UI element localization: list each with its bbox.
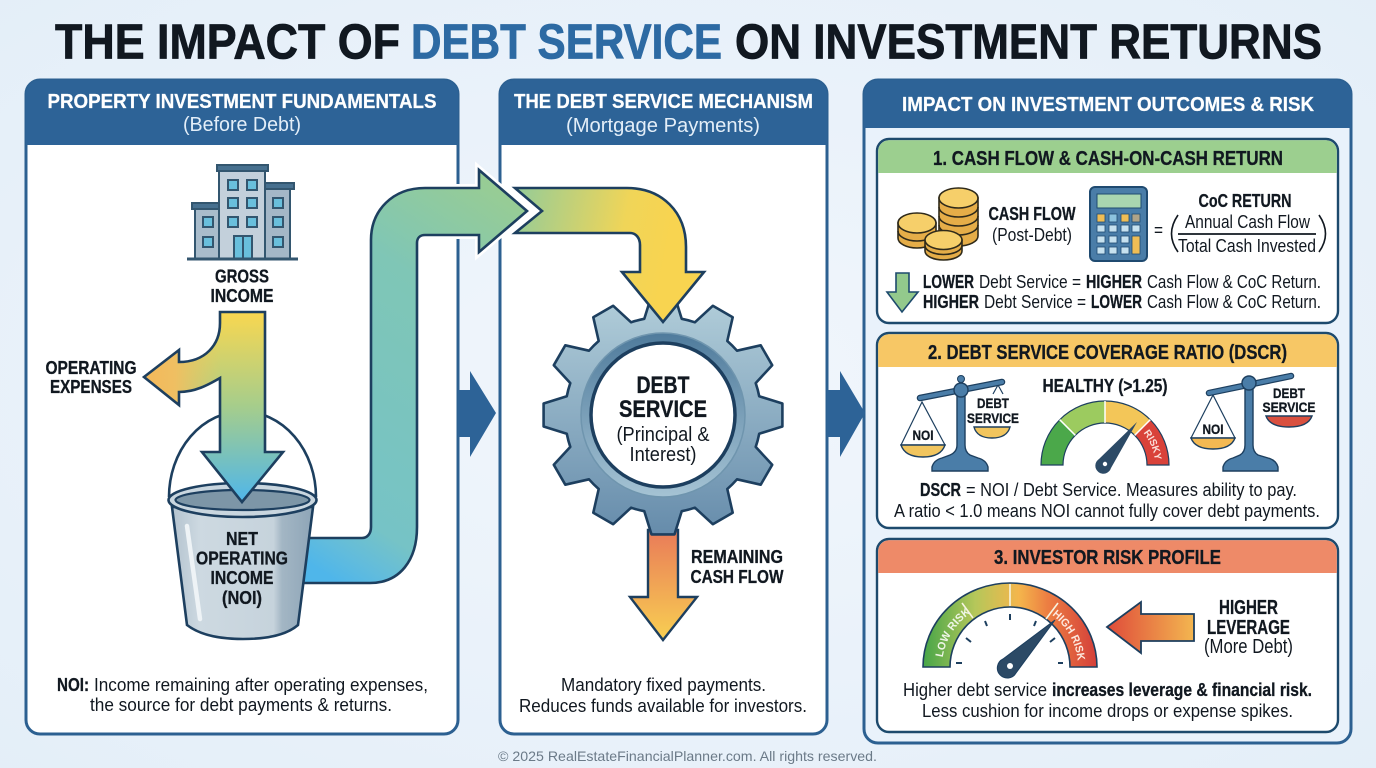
gauge: risk [922,582,1098,678]
label: healthy threshold: HEALTHY (>1.25) [1042,376,1168,396]
gauge: risk: HIGH RISK [1052,610,1086,661]
icon: balance scale, debt heavier: DEBT [1273,385,1305,401]
icon: bucket [168,411,316,639]
icon: building [187,165,298,259]
sub-panel 3 heading [878,540,1337,573]
icon: balance scale, debt heavier: NOI [1202,421,1224,437]
label: higher leverage: HIGHER [1219,597,1278,619]
label: higher leverage: LEVERAGE [1207,617,1290,639]
icon: balance scale, debt heavier: SERVICE [1262,399,1316,415]
icon: balance scale, debt heavier [1191,376,1316,471]
text: risk explanation: Higher debt service [903,680,1047,700]
sub-panel 3 heading: 3. INVESTOR RISK PROFILE [994,547,1221,569]
caption: NOI definition: NOI: [57,675,89,695]
icon: coins [898,188,978,260]
formula: CoC return: = [1154,220,1163,240]
panel: debt service mechanism [500,80,827,734]
panel header: mechanism: (Mortgage Payments) [566,115,760,137]
text: lower and higher debt service: LOWER [1091,292,1142,312]
label: higher leverage: (More Debt) [1204,636,1293,658]
text: lower and higher debt service: Debt Service = [984,292,1086,312]
sub-panel 1 heading: 1. CASH FLOW & CASH-ON-CASH RETURN [933,148,1283,170]
icon: calculator [1090,187,1147,261]
icon: balance scale, NOI heavier: SERVICE [967,410,1019,426]
label: gross income: INCOME [210,286,274,306]
text: risk explanation: increases leverage & financial risk. [1052,680,1312,700]
text: lower and higher debt service: LOWER [923,272,974,292]
label: debt service: SERVICE [619,396,707,423]
formula: CoC return: Total Cash Invested [1178,236,1316,256]
arrow: between panels 2 and 3 [827,371,865,457]
formula: CoC return: Annual Cash Flow [1185,212,1311,232]
text: lower and higher debt service: Debt Service = [979,272,1081,292]
sub-panel 2: debt service coverage ratio [876,332,1340,530]
sub-panel 1: cash flow and cash-on-cash return [877,139,1338,323]
gauge: DSCR [1040,400,1170,474]
panel header: fundamentals [26,80,458,145]
label: remaining cash flow: REMAINING [691,547,783,567]
caption: mandatory payments: Reduces funds available for investors. [519,696,807,716]
panel header: mechanism: THE DEBT SERVICE MECHANISM [514,91,813,113]
panel: property investment fundamentals [26,80,458,734]
label: gross income [210,266,274,306]
caption: NOI definition: Income remaining after operating expenses, [94,675,428,695]
panel header: fundamentals: PROPERTY INVESTMENT FUNDAMENTALS [48,91,436,113]
sub-panel 3: investor risk profile [876,538,1340,734]
caption: mandatory payments [519,675,807,716]
panel header: impact [864,80,1351,128]
label: net operating income [196,529,288,608]
text: DSCR definition: A ratio < 1.0 means NOI cannot fully cover debt payments. [894,501,1320,521]
label: higher leverage [1204,597,1293,658]
text: lower and higher debt service: HIGHER [923,292,979,312]
panel: impact on outcomes and risk [864,80,1351,743]
label: cash flow post-debt [988,204,1076,245]
text: DSCR definition: = NOI / Debt Service. Measures ability to pay. [966,480,1297,500]
label: remaining cash flow [690,547,784,587]
footer: copyright: © 2025 RealEstateFinancialPlanner.com. All rights reserved. [498,748,877,764]
sub-panel 2 heading [878,334,1337,367]
sub-panel 1 heading [878,140,1337,173]
label: debt service: Interest) [630,444,696,466]
gauge: risk: LOW RISK [935,608,971,657]
text: DSCR definition: DSCR [920,480,961,500]
caption: NOI definition: the source for debt payments & returns. [90,695,392,715]
icon: green down arrow [887,273,918,312]
formula: CoC return: CoC RETURN [1198,191,1292,211]
label: operating expenses: OPERATING [46,358,136,378]
gauge: DSCR: RISKY [1144,429,1162,459]
label: operating expenses [46,358,136,397]
arrow: NOI pipe to debt service [303,170,527,583]
panel header: fundamentals: (Before Debt) [183,114,301,136]
arrow: gross income to bucket with expenses branch [144,312,283,502]
panel header: mechanism [500,80,827,145]
sub-panel 2 heading: 2. DEBT SERVICE COVERAGE RATIO (DSCR) [928,342,1287,364]
title: THE IMPACT OF [55,16,400,70]
arrow: leverage pushes risk [1107,602,1194,653]
text: lower and higher debt service [923,272,1321,312]
text: risk explanation [903,680,1312,721]
label: cash flow post-debt: CASH FLOW [988,204,1076,224]
text: lower and higher debt service: HIGHER [1086,272,1142,292]
text: DSCR definition [894,480,1320,521]
icon: balance scale, NOI heavier [901,376,1019,471]
caption: NOI definition [57,675,428,715]
label: debt service: DEBT [636,372,690,399]
label: cash flow post-debt: (Post-Debt) [992,225,1072,245]
label: debt service: (Principal & [616,424,710,446]
label: operating expenses: EXPENSES [50,377,132,397]
icon: balance scale, NOI heavier: DEBT [977,395,1009,411]
label: net operating income: NET [226,529,258,549]
label: net operating income: (NOI) [222,588,262,608]
icon: debt service gear [544,296,782,534]
title [55,16,1322,70]
arrow: remaining cash flow [630,530,697,640]
arrow: between panels 1 and 2 [458,371,496,457]
caption: mandatory payments: Mandatory fixed payments. [561,675,766,695]
text: lower and higher debt service: Cash Flow & CoC Return. [1147,272,1321,292]
label: remaining cash flow: CASH FLOW [690,567,784,587]
arrow: into gear [515,188,704,322]
label: net operating income: INCOME [210,568,274,588]
text: risk explanation: Less cushion for income drops or expense spikes. [922,701,1293,721]
text: lower and higher debt service: Cash Flow & CoC Return. [1147,292,1321,312]
label: gross income: GROSS [215,266,269,286]
formula: CoC return [1154,191,1326,256]
icon: balance scale, NOI heavier: NOI [912,427,934,443]
title: DEBT SERVICE [411,16,722,70]
label: net operating income: OPERATING [196,548,288,568]
title: ON INVESTMENT RETURNS [735,16,1322,70]
panel header: impact: IMPACT ON INVESTMENT OUTCOMES & RISK [902,94,1315,116]
label: debt service [616,372,710,466]
